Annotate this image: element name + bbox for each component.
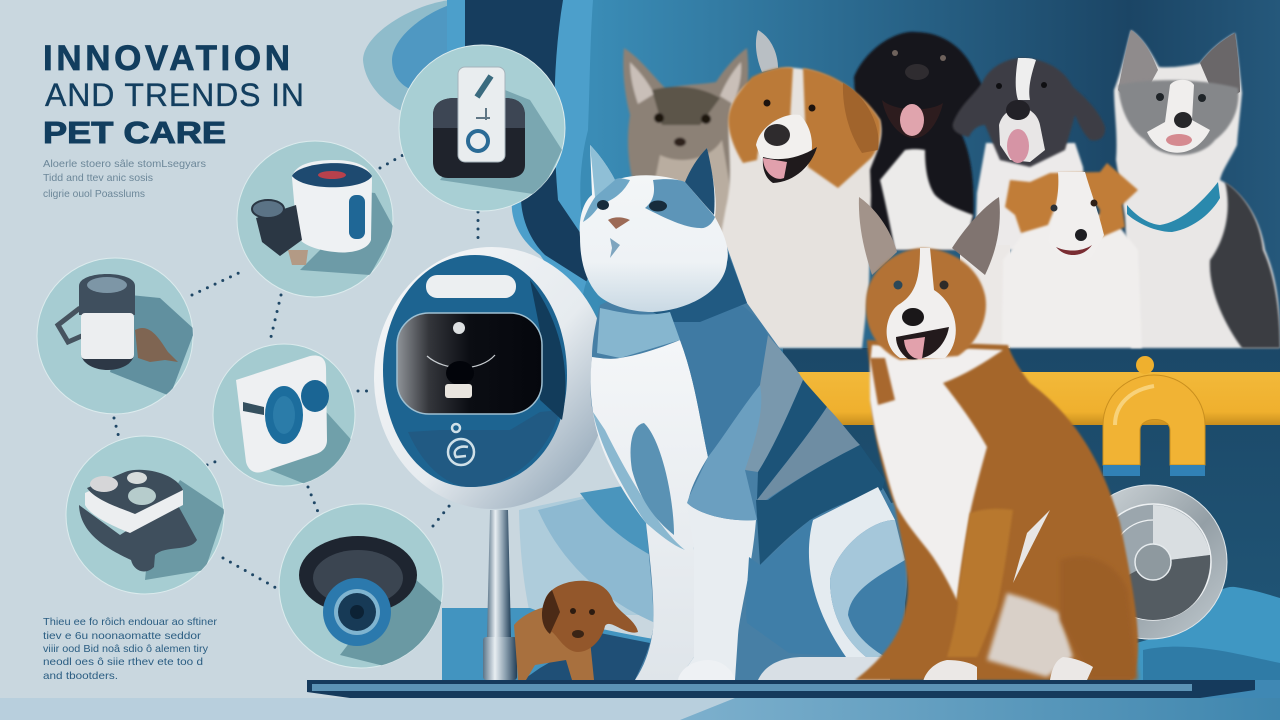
intro text: Tidd and ttev anic sosis xyxy=(43,172,153,184)
grey and white dog xyxy=(953,58,1105,250)
yellow pipe xyxy=(783,356,1280,476)
product circle 1: smart feeder xyxy=(399,45,565,211)
title: INNOVATION xyxy=(43,39,290,78)
small brown dog xyxy=(514,581,638,680)
body text: tiev e 6u noonaomatte seddor xyxy=(43,630,202,642)
intro text: cligrie ouol Poasslums xyxy=(43,188,145,200)
body text: Thieu ee fo rôich endouar ao sftiner xyxy=(43,616,218,628)
white chest xyxy=(870,345,1003,600)
product circle 5: double bowl xyxy=(66,436,225,594)
shoulder patch xyxy=(670,306,768,457)
dog head xyxy=(866,248,986,360)
screen xyxy=(397,313,542,414)
device disc xyxy=(374,247,610,509)
product circle 6: dark bowl and lens xyxy=(279,504,450,670)
product circle 4: blue disc device xyxy=(213,344,356,490)
front paws xyxy=(678,660,735,680)
dark lower stripe xyxy=(756,445,885,565)
body text: viiir ood Bid noâ sdio ô alemen tiry xyxy=(43,643,209,655)
title: PET CARE xyxy=(43,115,226,150)
lower blue patch xyxy=(687,385,783,520)
icons on shell xyxy=(448,424,474,465)
orange and white dog xyxy=(700,67,881,348)
paws xyxy=(923,660,977,682)
white torso and left leg xyxy=(591,340,708,680)
product circle 2: water dispenser xyxy=(237,141,395,297)
feather tail xyxy=(756,30,778,72)
cat body xyxy=(591,247,908,680)
dark stripe xyxy=(757,380,827,500)
brown and white dog xyxy=(855,197,1138,682)
haunch xyxy=(1060,556,1138,680)
cat head xyxy=(580,145,728,312)
grey stripe xyxy=(745,335,803,472)
chest spot xyxy=(870,358,895,405)
dotted connectors xyxy=(114,155,478,589)
husky xyxy=(1114,30,1280,348)
second grey stripe xyxy=(757,407,860,500)
handle xyxy=(426,275,516,298)
left flank band xyxy=(593,412,685,550)
body text xyxy=(43,616,218,682)
intro text: Aloerle stoero sâle stomLsegyars xyxy=(43,158,206,170)
intro text xyxy=(43,158,206,200)
device shell xyxy=(383,255,567,487)
product circle 3: travel mug xyxy=(37,258,195,414)
stand pole xyxy=(483,510,517,680)
body text: and tbootders. xyxy=(43,670,118,682)
dog body xyxy=(855,340,1138,680)
pale blue crescent xyxy=(830,520,905,665)
tabby cat xyxy=(623,48,748,300)
right front leg xyxy=(678,503,756,680)
body text: neodl oes ô siie rthev ete too d xyxy=(43,656,203,668)
small orange and white dog xyxy=(960,163,1142,348)
white crescent xyxy=(809,487,895,660)
title: AND TRENDS IN xyxy=(45,77,304,113)
collar xyxy=(1127,182,1220,232)
platform xyxy=(307,680,1255,698)
ears xyxy=(859,197,1000,275)
title xyxy=(43,39,304,150)
front leg xyxy=(947,509,1013,657)
black dog xyxy=(854,32,982,250)
belly white xyxy=(1013,510,1050,583)
hind leg xyxy=(746,500,905,665)
smart pet device xyxy=(374,247,610,680)
rear foot xyxy=(758,657,890,680)
blue ceramic cat xyxy=(580,145,908,680)
neck band xyxy=(653,250,747,322)
metal disc xyxy=(1073,485,1227,639)
collar patch xyxy=(597,308,680,358)
blue oval patch xyxy=(630,423,674,535)
